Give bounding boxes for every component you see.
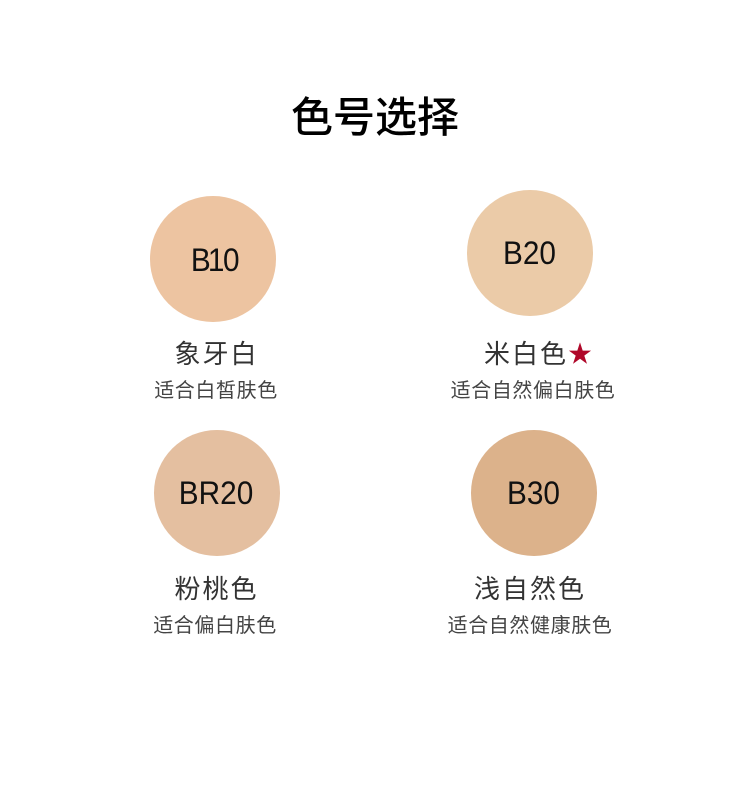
swatch: B10 (150, 196, 276, 322)
swatch: B30 (471, 430, 596, 556)
swatch: B20: B20 (503, 235, 556, 271)
swatch: BR20 (154, 430, 280, 556)
name: 米白色 with star: 米白色★ (484, 339, 592, 369)
title: 色号选择 (291, 94, 459, 141)
description: B20: 适合自然偏白肤色 (451, 380, 615, 402)
name: 粉桃色: 粉桃色 (174, 574, 259, 604)
name: 浅自然色: 浅自然色 (474, 574, 586, 604)
swatch: B10: B10 (190, 242, 239, 278)
swatch: BR20: BR20 (179, 475, 253, 511)
name: 象牙白: 象牙白 (174, 339, 259, 369)
description: B30: 适合自然健康肤色 (448, 615, 612, 637)
description: BR20: 适合偏白肤色 (153, 615, 277, 637)
swatch: B30: B30 (507, 475, 560, 511)
swatch: B20 (467, 190, 592, 316)
description: B10: 适合白皙肤色 (154, 380, 278, 402)
